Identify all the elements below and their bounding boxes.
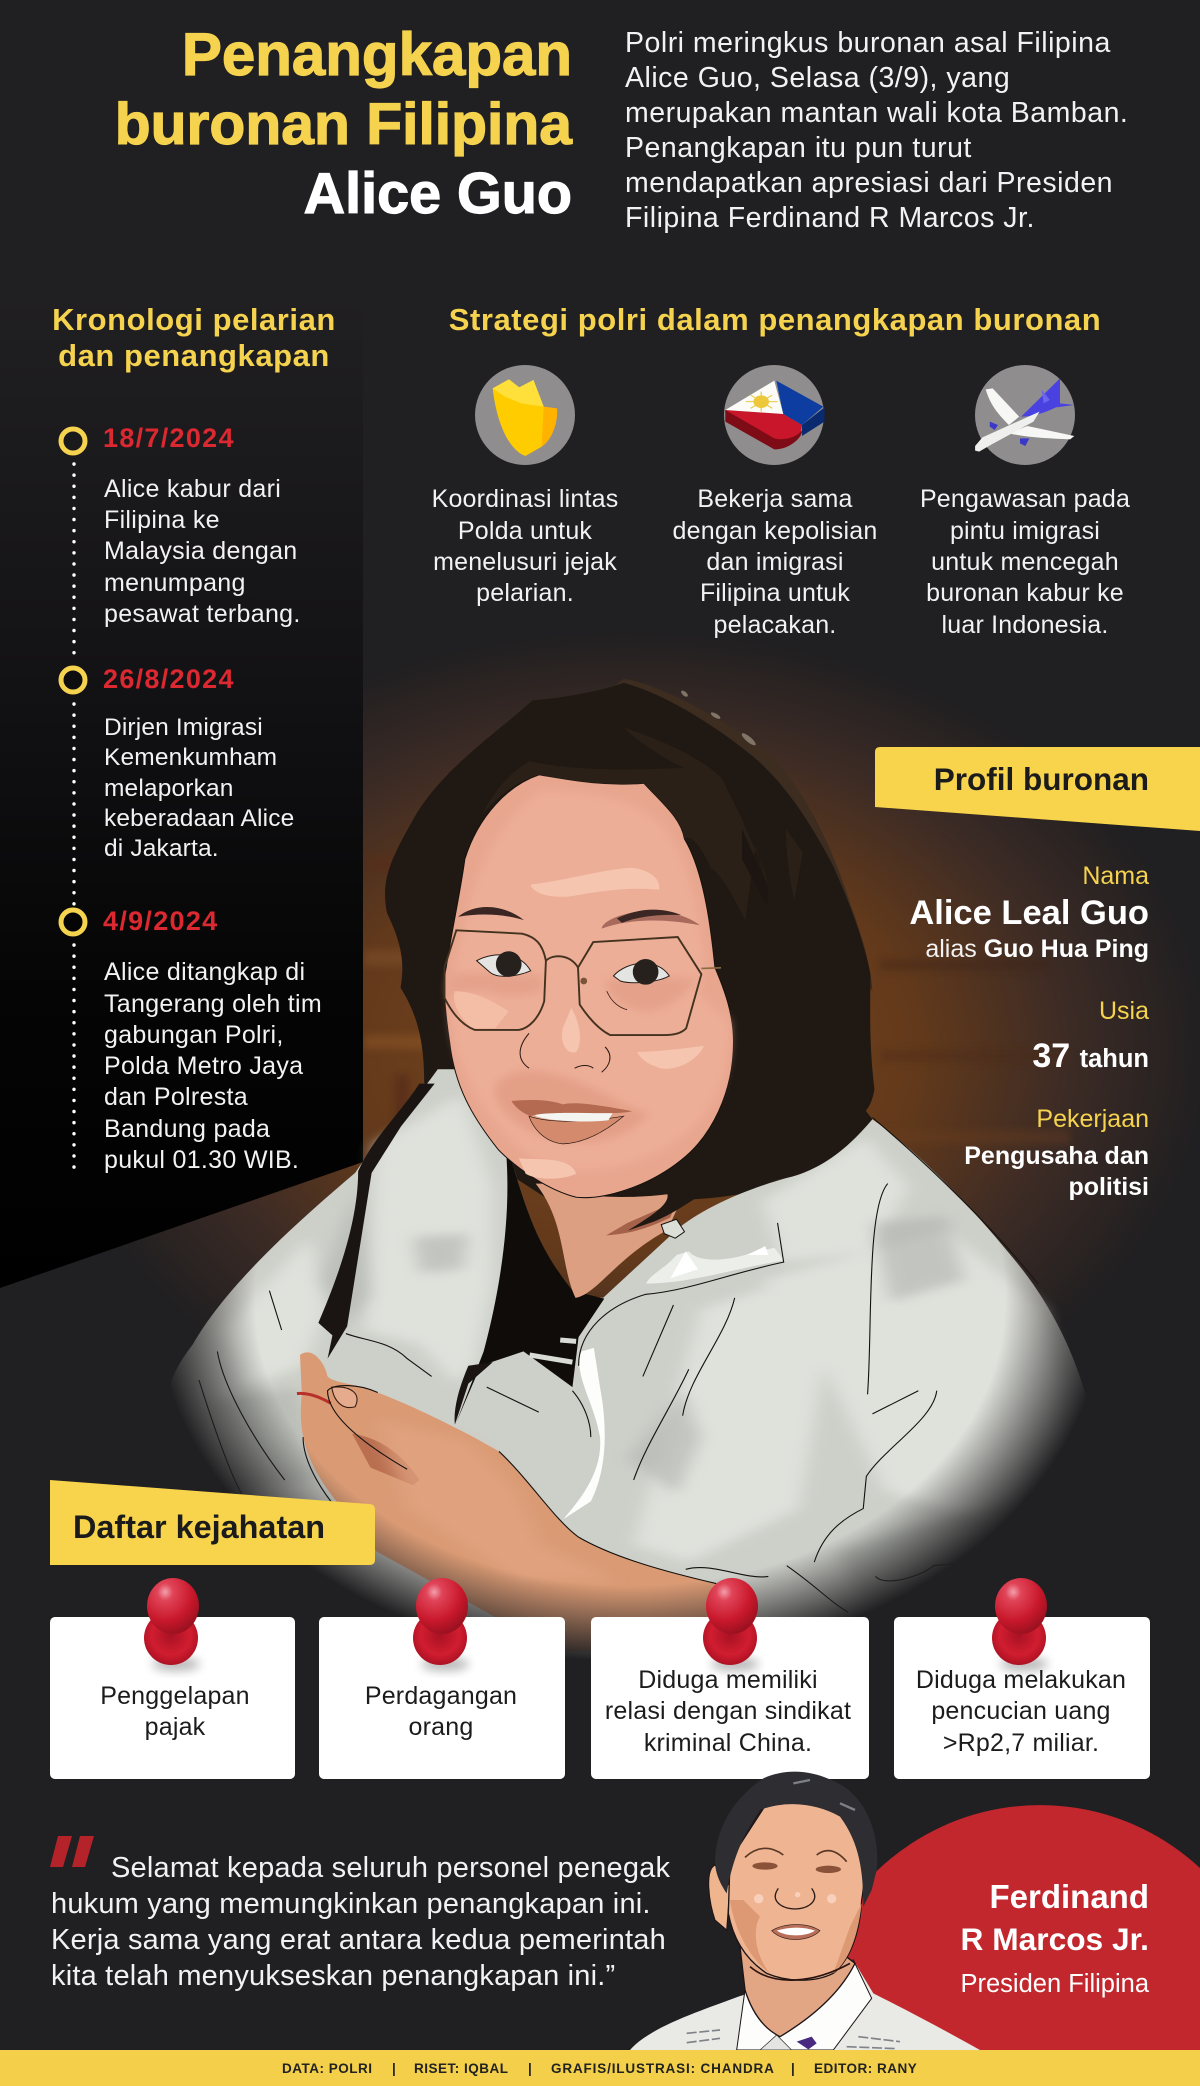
eyes — [477, 955, 531, 976]
portrait: Alice Guo — [162, 679, 1093, 1659]
panel: profil details: Usia — [1099, 997, 1149, 1025]
heading: strategi: Strategi polri dalam penangkapan buronan — [449, 302, 1101, 337]
card: pencucian uang — [894, 1617, 1150, 1779]
panel: profil details — [909, 862, 1149, 1201]
jacket, hand and neck — [162, 1069, 1093, 1659]
icon: pin 4 — [992, 1578, 1048, 1671]
card: pencucian uang: >Rp2,7 miliar. — [943, 1729, 1099, 1757]
heading: kronologi: Kronologi pelarian — [52, 302, 336, 337]
tab: profil buronan: Profil buronan — [934, 761, 1149, 797]
text — [432, 485, 618, 607]
event 1: menumpang — [104, 569, 246, 597]
card: sindikat — [591, 1617, 869, 1779]
ear — [709, 1865, 730, 1930]
footer: | — [791, 2061, 795, 2076]
event 1: Filipina ke — [104, 506, 220, 534]
hair back — [385, 679, 874, 1200]
event 3: Alice ditangkap di — [104, 958, 305, 986]
text: buronan kabur ke — [926, 579, 1124, 607]
panel: profil details: politisi — [1068, 1173, 1149, 1201]
event 3: Tangerang oleh tim — [104, 990, 322, 1018]
footer: | — [528, 2061, 532, 2076]
panel: timeline — [61, 423, 322, 1175]
intro paragraph: merupakan mantan wali kota Bamban. — [625, 97, 1128, 129]
mouth — [772, 1925, 820, 1940]
event 2 — [103, 664, 294, 862]
event 1: Malaysia dengan — [104, 537, 298, 565]
icon: pin 2 — [413, 1578, 469, 1671]
title: buronan Filipina — [115, 92, 573, 157]
card: perdagangan orang: Perdagangan — [365, 1682, 517, 1710]
timeline marker 3 — [61, 910, 85, 934]
intro paragraph — [625, 27, 1128, 234]
footer: | — [392, 2061, 396, 2076]
heading: kronologi: dan penangkapan — [58, 338, 330, 373]
quote mark — [50, 1836, 94, 1867]
event 2: di Jakarta. — [104, 835, 219, 862]
event 3: 4/9/2024 — [103, 906, 218, 936]
intro paragraph: Penangkapan itu pun turut — [625, 132, 972, 164]
card: penggelapan pajak: Penggelapan — [100, 1682, 250, 1710]
text: pelacakan. — [714, 611, 836, 639]
jacket lines — [872, 1117, 1038, 1284]
card: pencucian uang: Diduga melakukan — [916, 1666, 1126, 1694]
brows — [745, 1848, 847, 1862]
icon: philippine flag — [724, 365, 824, 465]
mouth — [529, 1116, 624, 1144]
intro paragraph: Alice Guo, Selasa (3/9), yang — [625, 62, 1010, 94]
tab: profil buronan — [875, 747, 1200, 831]
quote text: Kerja sama yang erat antara kedua pemerintah — [51, 1924, 666, 1956]
text: Filipina untuk — [700, 579, 850, 607]
nose — [775, 1888, 815, 1909]
quote text — [51, 1852, 670, 1992]
red circle — [805, 1805, 1200, 2050]
text: dengan kepolisian — [673, 517, 877, 545]
speaker name — [960, 1878, 1150, 1998]
intro paragraph: mendapatkan apresiasi dari Presiden — [625, 167, 1113, 199]
text — [920, 485, 1130, 639]
dotted timeline — [72, 464, 76, 1175]
icon: pin 1 — [144, 1578, 200, 1671]
event 3: Bandung pada — [104, 1115, 270, 1143]
tab: daftar kejahatan — [50, 1480, 375, 1565]
event 3 — [103, 906, 322, 1174]
shirt and suit — [630, 1960, 980, 2050]
text: dan imigrasi — [706, 548, 844, 576]
event 3: dan Polresta — [104, 1083, 248, 1111]
face — [444, 689, 803, 1198]
hand — [300, 1352, 716, 1651]
footer: EDITOR: RANY — [814, 2061, 917, 2076]
speaker name: Presiden Filipina — [960, 1970, 1150, 1998]
title: Penangkapan — [182, 21, 572, 88]
panel: strategi 1 — [432, 365, 618, 607]
card: sindikat: Diduga memiliki — [638, 1666, 818, 1694]
face — [728, 1801, 864, 1980]
event 1 — [103, 423, 301, 628]
intro paragraph: Polri meringkus buronan asal Filipina — [625, 27, 1111, 59]
event 3: pukul 01.30 WIB. — [104, 1146, 299, 1174]
title — [115, 21, 573, 226]
panel: profil details: Nama — [1082, 862, 1149, 890]
fringe strands — [482, 727, 767, 920]
panel: profil details: 37 tahun — [1032, 1037, 1149, 1075]
event 2: melaporkan — [104, 775, 234, 802]
tab: daftar kejahatan: Daftar kejahatan — [73, 1509, 325, 1545]
event 2: Dirjen Imigrasi — [104, 714, 263, 741]
quote text: hukum yang memungkinkan penangkapan ini. — [51, 1888, 651, 1920]
panel: strategi 2 — [673, 365, 877, 639]
footer: RISET: IQBAL — [414, 2061, 509, 2076]
speaker name: R Marcos Jr. — [961, 1921, 1149, 1957]
card: sindikat: kriminal China. — [644, 1729, 812, 1757]
card: perdagangan orang — [319, 1617, 565, 1779]
event 1: Alice kabur dari — [104, 475, 281, 503]
card: perdagangan orang: orang — [409, 1713, 473, 1741]
speaker name: Ferdinand — [989, 1878, 1149, 1915]
text: Polda untuk — [458, 517, 592, 545]
heading: kronologi — [52, 302, 336, 373]
collar black strip — [318, 1084, 435, 1359]
panel: strategi 3 — [920, 365, 1130, 639]
event 2: keberadaan Alice — [104, 805, 294, 832]
text: pelarian. — [476, 579, 574, 607]
brick wall glow behind portrait — [0, 630, 1200, 1530]
hair — [715, 1772, 877, 1907]
card: penggelapan pajak: pajak — [145, 1713, 206, 1741]
inner dark shirt — [456, 1155, 604, 1423]
timeline marker 2 — [61, 668, 85, 692]
icon: pin 3 — [703, 1578, 759, 1671]
card: penggelapan pajak — [50, 1617, 295, 1779]
intro paragraph: Filipina Ferdinand R Marcos Jr. — [625, 202, 1035, 234]
panel: profil details: alias Guo Hua Ping — [925, 935, 1149, 963]
icon: shield — [475, 365, 575, 465]
text: luar Indonesia. — [941, 611, 1109, 639]
text — [673, 485, 877, 639]
text: menelusuri jejak — [433, 548, 617, 576]
panel: profil details: Alice Leal Guo — [909, 894, 1149, 932]
icon: airplane — [975, 365, 1075, 465]
eyebrows — [602, 910, 700, 929]
footer: DATA: POLRI — [282, 2061, 372, 2076]
event 2: 26/8/2024 — [103, 664, 235, 694]
panel: timeline backdrop — [0, 300, 363, 1288]
card: sindikat: relasi dengan sindikat — [605, 1697, 851, 1725]
panel: profil details: Pengusaha dan — [964, 1142, 1149, 1170]
nose — [520, 1033, 610, 1072]
event 2: Kemenkumham — [104, 744, 277, 771]
zipper highlight — [563, 1348, 605, 1519]
neck — [536, 1184, 689, 1298]
panel: profil details: Pekerjaan — [1036, 1105, 1149, 1133]
quote text: kita telah menyukseskan penangkapan ini.” — [51, 1960, 615, 1992]
event 1: 18/7/2024 — [103, 423, 235, 453]
text: Pengawasan pada — [920, 485, 1130, 513]
event 3: gabungan Polri, — [104, 1021, 284, 1049]
text: pintu imigrasi — [950, 517, 1100, 545]
quote text: Selamat kepada seluruh personel penegak — [111, 1852, 670, 1884]
glasses — [445, 930, 546, 1030]
text: Koordinasi lintas — [432, 485, 618, 513]
card: pencucian uang: pencucian uang — [931, 1697, 1111, 1725]
event 3: Polda Metro Jaya — [104, 1052, 303, 1080]
text: Bekerja sama — [697, 485, 853, 513]
portrait: Marcos — [630, 1772, 980, 2050]
hair over neck — [603, 1111, 872, 1231]
title: Alice Guo — [304, 162, 572, 226]
eyes — [752, 1862, 778, 1870]
footer — [0, 2050, 1200, 2086]
timeline marker 1 — [61, 429, 85, 453]
footer: GRAFIS/ILUSTRASI: CHANDRA — [551, 2061, 775, 2076]
event 1: pesawat terbang. — [104, 600, 301, 628]
text: untuk mencegah — [931, 548, 1119, 576]
